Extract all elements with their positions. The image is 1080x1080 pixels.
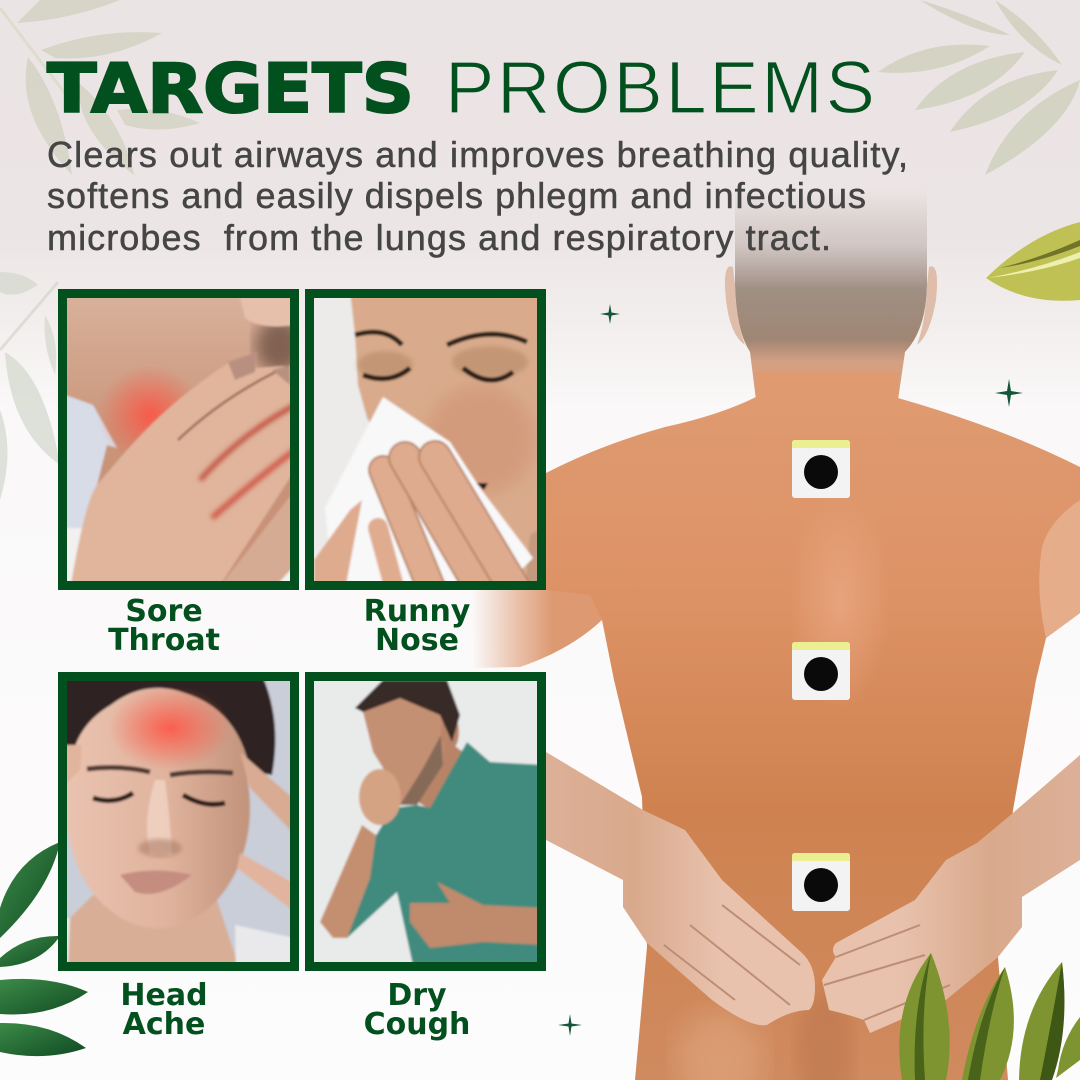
title: TARGETS bbox=[47, 50, 414, 129]
label: dry cough: Dry bbox=[387, 978, 447, 1013]
label: dry cough: Cough bbox=[364, 1007, 470, 1042]
photo: head ache bbox=[60, 675, 295, 970]
leaf: top right lime bbox=[986, 222, 1080, 301]
label: runny nose: Runny bbox=[364, 594, 470, 629]
decorative leaves: left middle bbox=[0, 272, 60, 500]
description text: softens and easily dispels phlegm and infectious bbox=[47, 175, 866, 216]
patches on back bbox=[792, 440, 850, 911]
label: head ache: Head bbox=[120, 978, 208, 1013]
label: dry cough bbox=[364, 978, 470, 1042]
photo: sore throat bbox=[60, 290, 305, 590]
leaves: bottom left bbox=[0, 842, 88, 1056]
title: PROBLEMS bbox=[445, 46, 875, 129]
label: runny nose bbox=[364, 594, 470, 658]
description text: Clears out airways and improves breathing quality, bbox=[47, 134, 908, 175]
label: head ache: Ache bbox=[123, 1007, 205, 1042]
photo: runny nose bbox=[310, 290, 545, 590]
label: sore throat: Throat bbox=[108, 623, 220, 658]
label: sore throat bbox=[108, 594, 220, 658]
decorative leaves: top left bbox=[0, 0, 200, 175]
label: sore throat: Sore bbox=[125, 594, 203, 629]
title bbox=[47, 46, 875, 129]
sparkles bbox=[558, 304, 1023, 1036]
description text: microbes from the lungs and respiratory tract. bbox=[47, 217, 831, 258]
label: runny nose: Nose bbox=[375, 623, 459, 658]
description text bbox=[47, 134, 908, 258]
label: head ache bbox=[120, 978, 208, 1042]
leaves: bottom right bbox=[899, 953, 1080, 1080]
decorative leaves: top right bbox=[878, 0, 1080, 175]
photo: dry cough bbox=[310, 675, 545, 970]
man's back with hands bbox=[470, 190, 1080, 1080]
